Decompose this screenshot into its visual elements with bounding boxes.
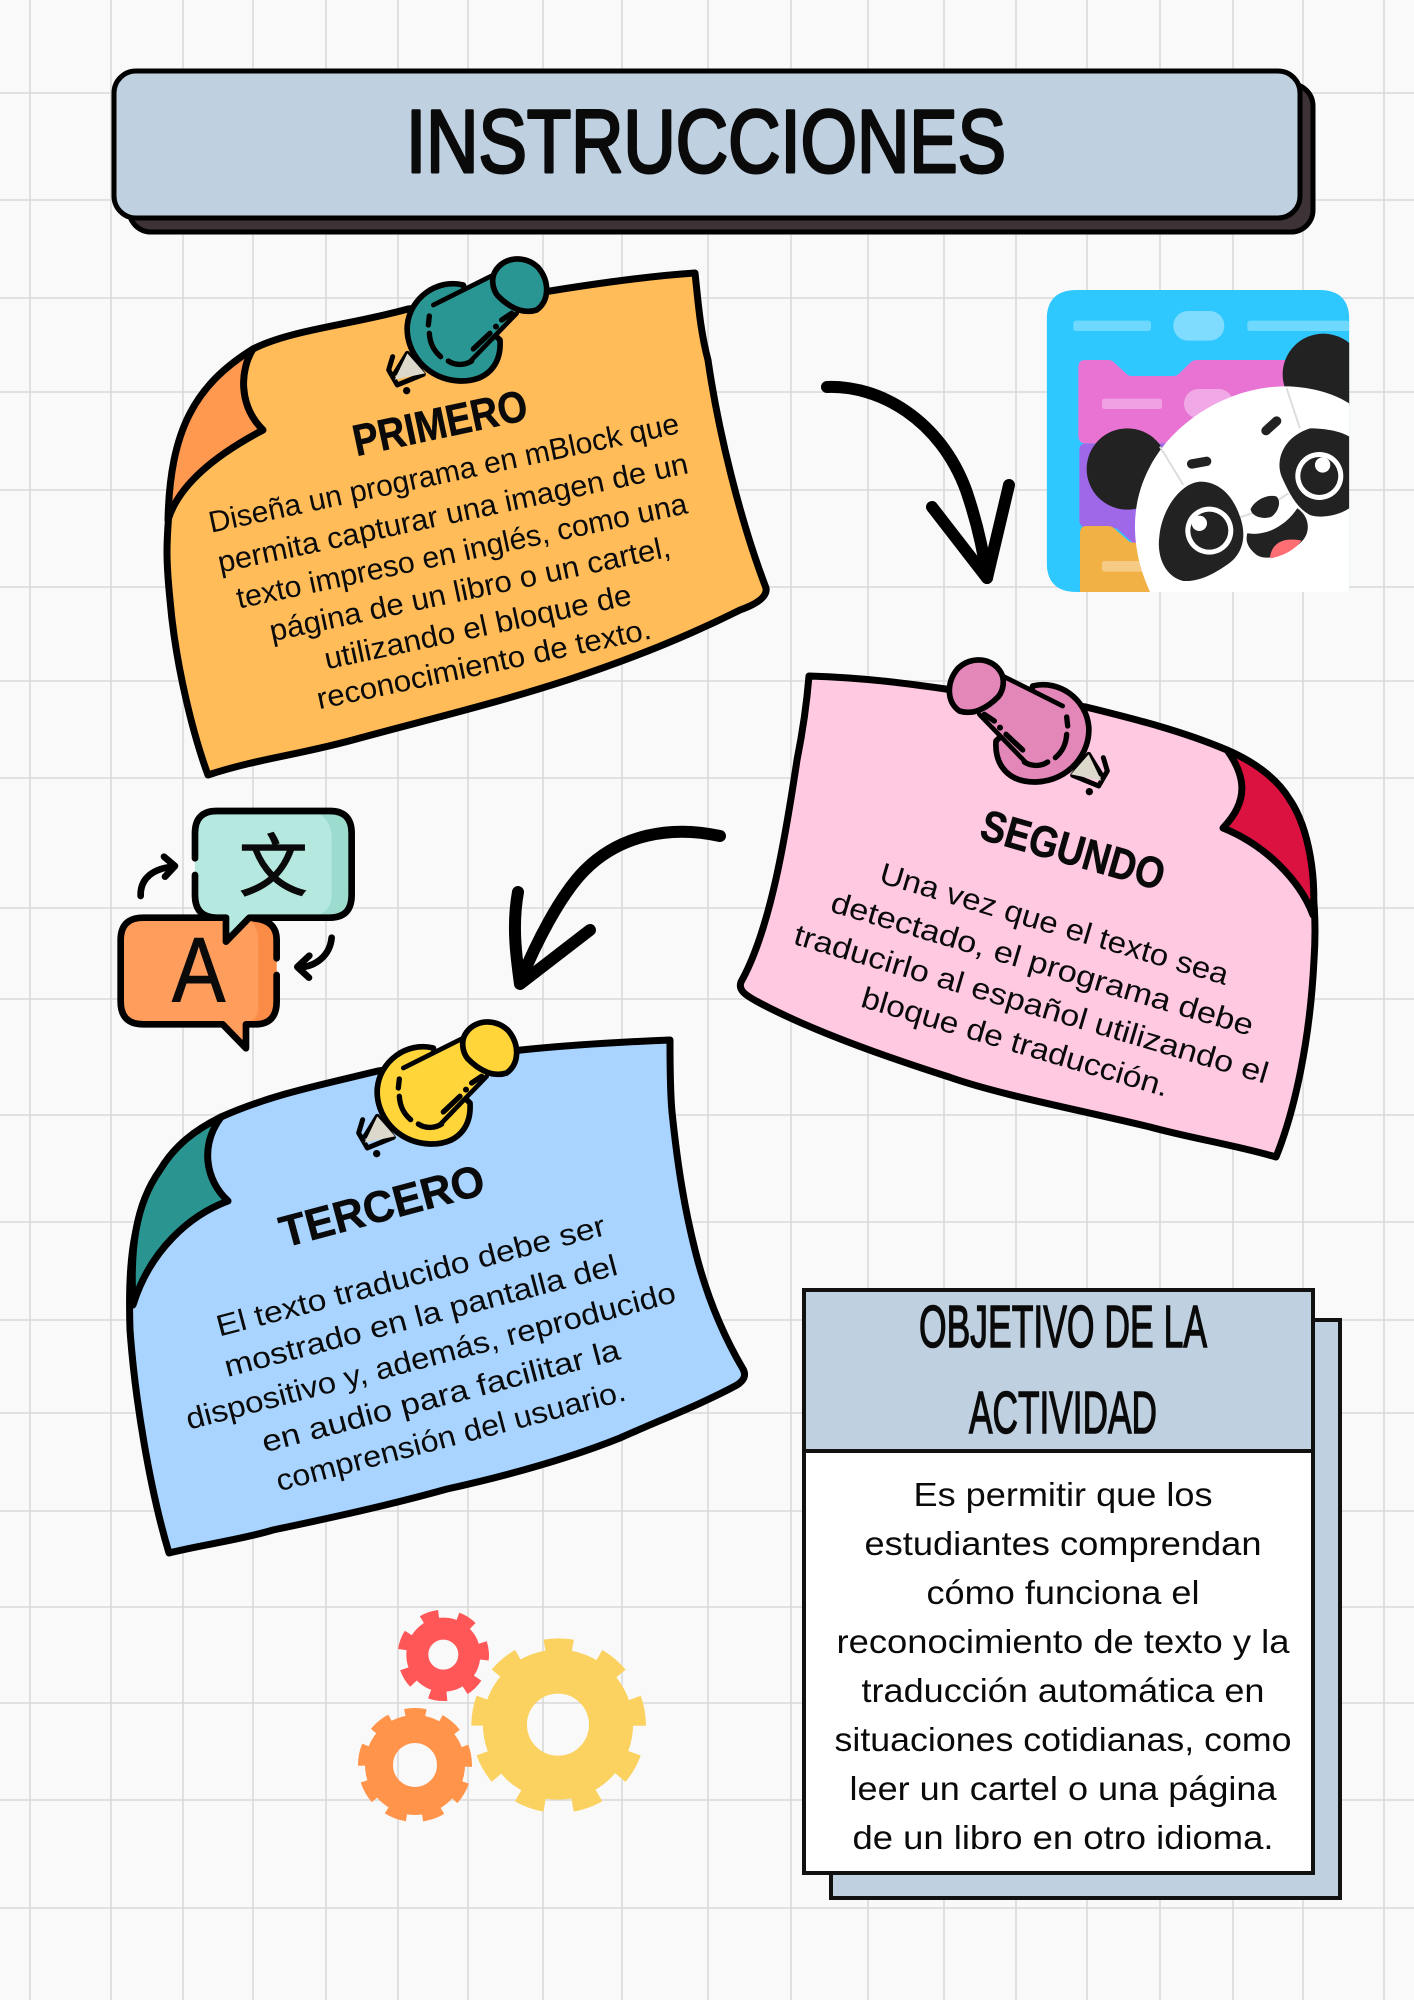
red gear	[388, 1600, 499, 1711]
arrow: primero to panda	[827, 387, 1009, 578]
text block: tercero: comprensión del usuario.	[273, 1375, 629, 1498]
text block: primero: texto impreso en inglés, como una	[233, 487, 691, 615]
arrow: segundo to tercero	[515, 832, 720, 984]
text block: segundo: Una vez que el texto sea	[876, 857, 1233, 992]
panel body text: estudiantes comprendan	[864, 1525, 1262, 1562]
panel header: OBJETIVO DE LA	[919, 1294, 1207, 1360]
panel body text: situaciones cotidianas, como	[834, 1721, 1292, 1758]
text block: tercero: dispositivo y, además, reproducido	[182, 1276, 679, 1437]
panel header	[804, 1290, 1313, 1451]
note curl: teal	[132, 1117, 228, 1305]
heading: tercero: TERCERO	[274, 1156, 490, 1257]
text block: primero: Diseña un programa en mBlock que	[206, 407, 682, 540]
yellow gear	[466, 1633, 651, 1818]
panel header: ACTIVIDAD	[969, 1380, 1157, 1446]
text block: tercero: El texto traducido debe ser	[213, 1210, 609, 1343]
note curl: red	[1223, 750, 1314, 915]
panel body text: leer un cartel o una página	[850, 1770, 1277, 1807]
text block: segundo: traducirlo al español utilizando el	[790, 919, 1272, 1090]
icon: teal push pin	[389, 259, 547, 394]
icon: gears	[354, 1600, 651, 1826]
text block: primero: permita capturar una imagen de un	[215, 447, 691, 580]
orange gear	[354, 1704, 476, 1826]
panel body text	[834, 1476, 1292, 1856]
text block: segundo	[790, 857, 1272, 1104]
teal bubble with character	[195, 811, 352, 942]
panel body text: Es permitir que los	[914, 1476, 1212, 1513]
text block: tercero: en audio para facilitar la	[258, 1334, 624, 1459]
teal bubble with character: 文	[239, 812, 307, 911]
text block: segundo: detectado, el programa debe	[827, 886, 1257, 1043]
icon: translate speech bubbles	[121, 811, 352, 1048]
title banner	[114, 71, 1313, 232]
text block: primero	[206, 407, 691, 716]
icon: yellow push pin	[359, 1022, 517, 1157]
panel: segundo note	[740, 676, 1315, 1157]
panel: primero note	[167, 273, 766, 775]
title text: INSTRUCCIONES	[406, 91, 1006, 191]
icon: pink push pin	[949, 660, 1107, 795]
panel body text: cómo funciona el	[926, 1574, 1200, 1611]
icon: mblock panda logo	[1047, 290, 1364, 593]
panel body text: reconocimiento de texto y la	[836, 1623, 1290, 1660]
heading: segundo: SEGUNDO	[975, 801, 1170, 900]
text block: segundo: bloque de traducción.	[858, 981, 1173, 1104]
text block: primero: página de un libro o un cartel,	[266, 531, 673, 648]
heading: primero: PRIMERO	[348, 381, 532, 466]
orange bubble with letter A: A	[172, 920, 225, 1022]
note curl: orange	[168, 349, 263, 520]
panel: tercero note	[130, 1040, 745, 1553]
text block: primero: reconocimiento de texto.	[314, 613, 654, 716]
text block: tercero	[182, 1210, 679, 1498]
panel: objetivo de la actividad	[804, 1290, 1340, 1898]
orange bubble with letter A	[121, 918, 277, 1048]
panel body text: traducción automática en	[862, 1672, 1264, 1709]
panel body text: de un libro en otro idioma.	[852, 1819, 1274, 1856]
text block: primero: utilizando el bloque de	[321, 579, 634, 676]
text block: tercero: mostrado en la pantalla del	[221, 1249, 621, 1384]
